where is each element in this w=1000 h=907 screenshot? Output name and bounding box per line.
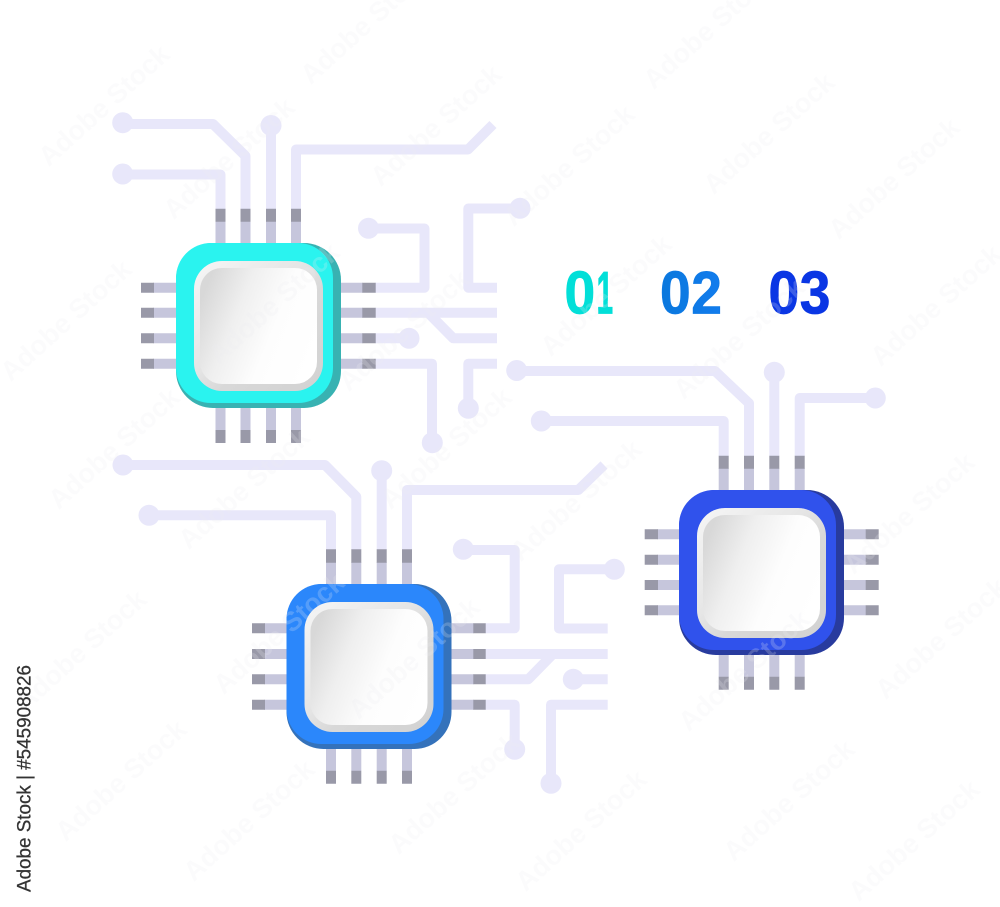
circuit traces: chip 2 [112, 454, 625, 794]
number 03: 03 [768, 261, 830, 327]
watermark pattern: Adobe Stock [843, 773, 986, 907]
chip 2: blue processor [252, 549, 486, 784]
number 01 [564, 261, 613, 328]
number 01: 0 [564, 261, 595, 327]
watermark pattern: Adobe Stock [158, 91, 301, 225]
chip 3 pins [645, 456, 879, 690]
watermark pattern: Adobe Stock [838, 446, 981, 580]
watermark pattern: Adobe Stock [718, 733, 861, 867]
watermark pattern: Adobe Stock [823, 111, 966, 245]
watermark pattern: Adobe Stock [208, 566, 351, 700]
watermark pattern: Adobe Stock [178, 753, 321, 887]
watermark pattern: Adobe Stock [383, 726, 526, 860]
watermark pattern: Adobe Stock [203, 236, 346, 370]
watermark pattern: Adobe Stock [10, 583, 153, 717]
watermark pattern: Adobe Stock [173, 421, 316, 555]
watermark pattern: Adobe Stock [505, 433, 648, 567]
number 02: 02 [660, 261, 722, 327]
circuit traces: chip 1 [112, 112, 530, 453]
watermark pattern: Adobe Stock [50, 713, 193, 847]
watermark pattern: Adobe Stock [375, 381, 518, 515]
watermark pattern: Adobe Stock [673, 603, 816, 737]
watermark pattern: Adobe Stock [498, 98, 641, 232]
chip 3: indigo processor [645, 456, 879, 690]
stock id caption: Adobe Stock | #545908826 [14, 665, 36, 892]
circuit traces: chip 3 [506, 360, 886, 456]
watermark pattern: Adobe Stock [510, 763, 653, 897]
number 01: 1 [596, 261, 613, 328]
watermark pattern: Adobe Stock [33, 38, 176, 172]
watermark pattern: Adobe Stock [43, 381, 186, 515]
watermark pattern: Adobe Stock [668, 271, 811, 405]
watermark pattern: Adobe Stock [333, 263, 476, 397]
watermark pattern: Adobe Stock [365, 58, 508, 192]
watermark pattern: Adobe Stock [535, 228, 678, 362]
chip 2 pins [252, 549, 486, 784]
chip 1 pins [141, 209, 376, 443]
chip 1: cyan processor [141, 209, 376, 443]
watermark pattern: Adobe Stock [343, 591, 486, 725]
watermark pattern: Adobe Stock [698, 66, 841, 200]
